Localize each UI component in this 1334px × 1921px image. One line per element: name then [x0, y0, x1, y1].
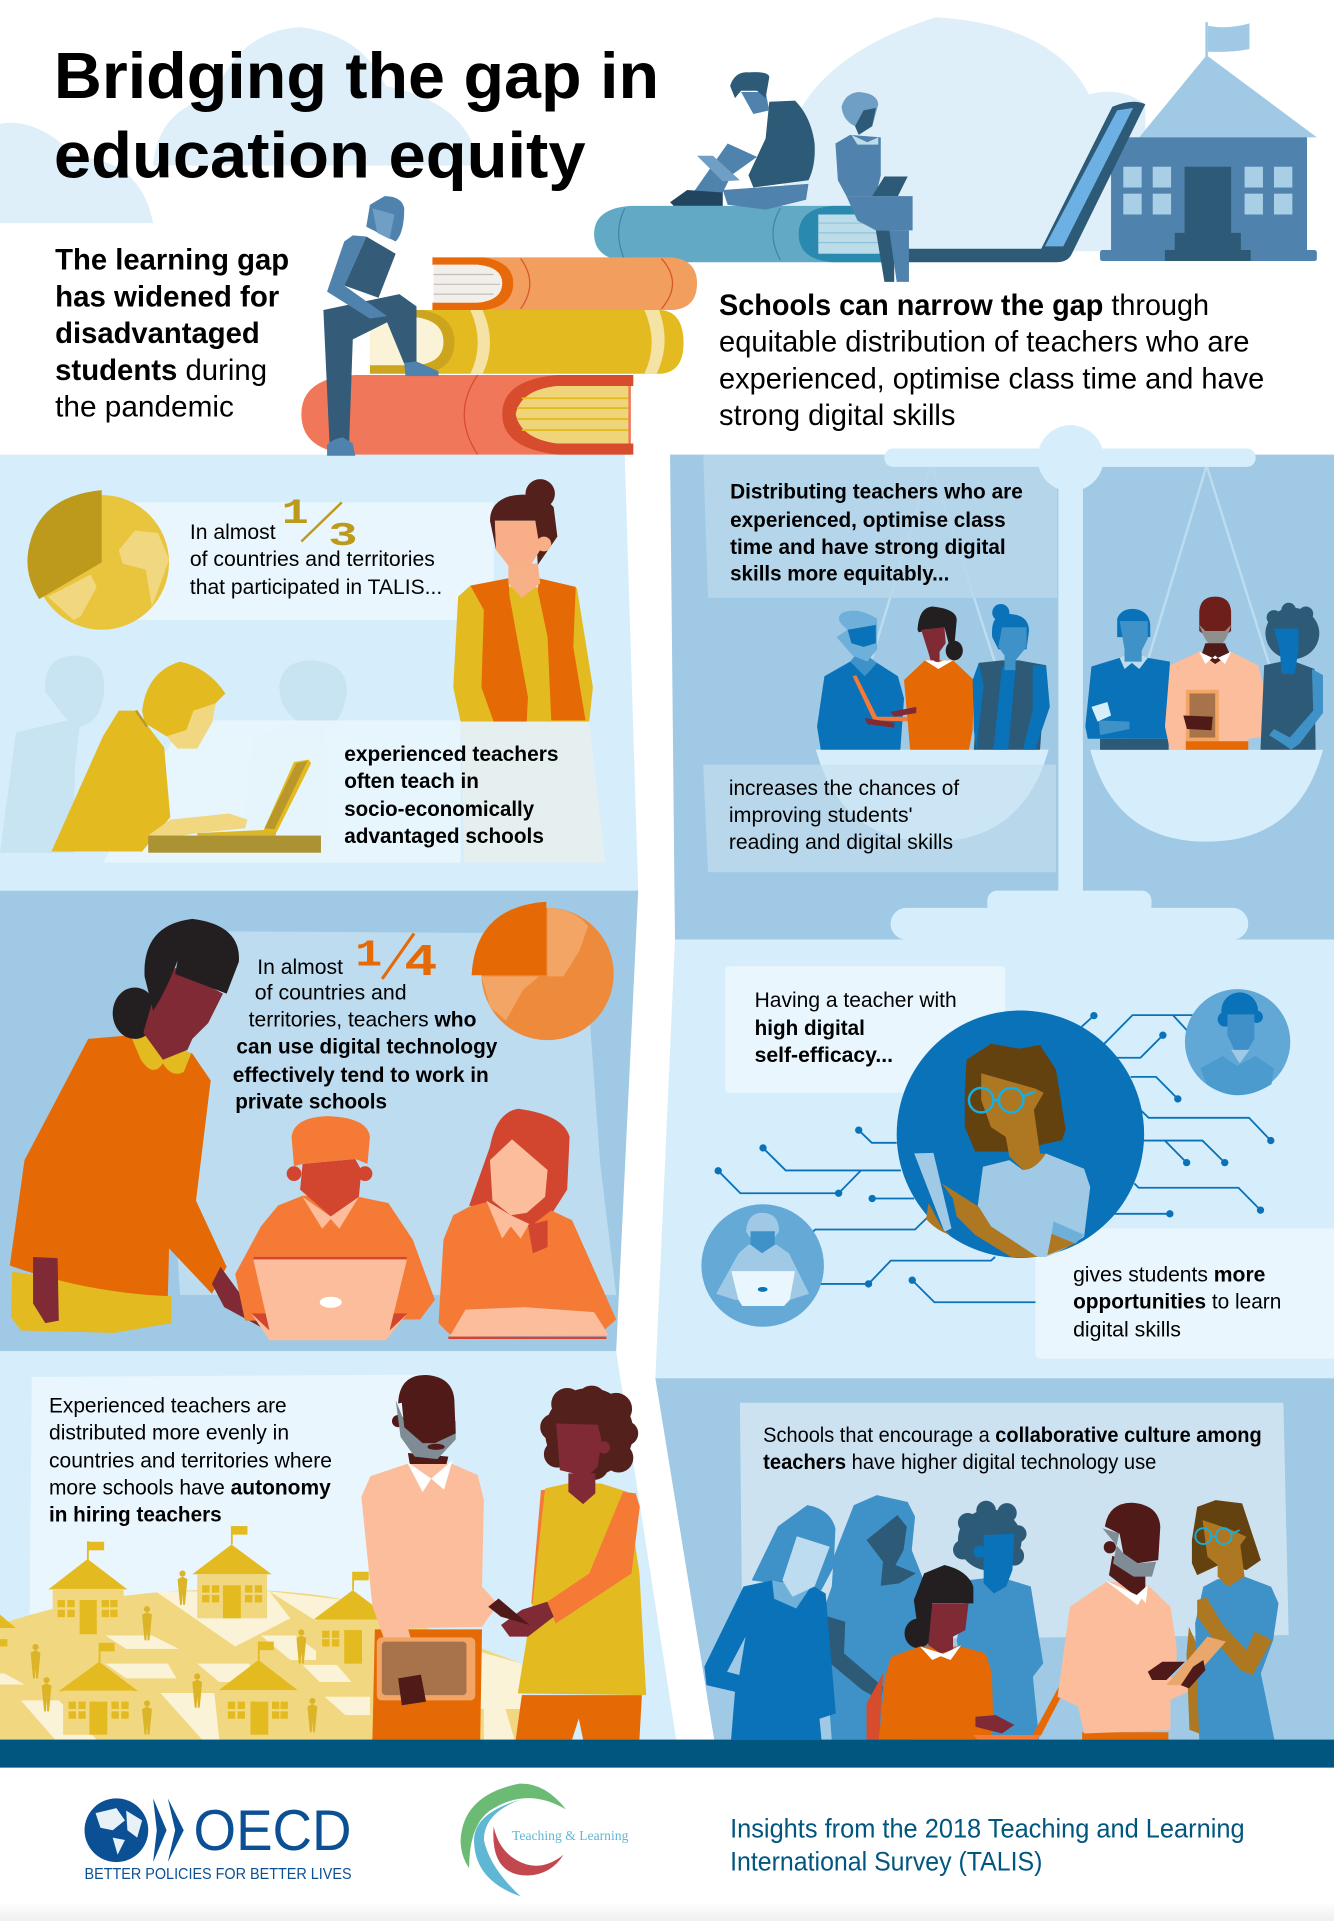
- figure: student in yellow hood: [51, 662, 247, 851]
- text: Schools that encourage a collaborative culture among: [763, 1424, 1262, 1447]
- text: having a teacher: [755, 989, 957, 1067]
- title: education equity: [54, 119, 586, 192]
- text: experienced teachers: [344, 743, 559, 766]
- text: socio-economically: [344, 798, 535, 821]
- icon: teal book: [594, 206, 888, 262]
- panel: left section 3 background: [0, 1351, 676, 1740]
- text: distributing teachers: skills more equitably...: [730, 563, 949, 586]
- fraction one quarter: [355, 934, 437, 989]
- text: having a teacher: Having a teacher with: [755, 989, 957, 1012]
- footer text: survey source: Insights from the 2018 Teaching and Learning: [730, 1814, 1245, 1844]
- panel: learning gap text: students during: [55, 354, 267, 387]
- text box: [171, 931, 616, 1295]
- figure: bearded man with tablet: [1165, 597, 1274, 750]
- icon: globe with one quarter wedge: [472, 902, 614, 1040]
- footer text: survey source: [730, 1814, 1245, 1877]
- fraction one third: 3: [328, 517, 358, 555]
- scale pan left: [816, 750, 1049, 842]
- text box: gives students: [1035, 1228, 1334, 1359]
- title: [54, 39, 659, 192]
- text box: [740, 1403, 1289, 1640]
- icon: teacher in circle: [897, 1010, 1144, 1258]
- figure: teacher in blue: [704, 1505, 836, 1740]
- panel: learning gap text: The learning gap: [55, 244, 289, 277]
- figure: boy student: [235, 1116, 435, 1321]
- text: increases chances: increases the chances of: [729, 777, 959, 800]
- circuit lines: [718, 1015, 1271, 1302]
- figures: group on left pan: [817, 604, 1050, 750]
- text box: [29, 1375, 429, 1629]
- figure: bearded man with laptop: [817, 611, 919, 750]
- panel: left section 2 background: [0, 891, 638, 1351]
- figure: teacher in vest: [453, 479, 593, 722]
- icon: yellow book: [370, 310, 684, 374]
- text: having a teacher: high digital: [755, 1017, 865, 1040]
- figure: teacher in orange: [867, 1565, 1014, 1740]
- text: distributing teachers: [730, 481, 1023, 586]
- text: countries and territories where: [49, 1450, 332, 1473]
- icon: crescent arcs: [461, 1784, 566, 1896]
- panel: right section 3 background: [655, 1378, 1334, 1740]
- figure: woman in orange: [891, 606, 974, 750]
- panel: learning gap text: disadvantaged: [55, 317, 260, 350]
- text: more schools have autonomy: [49, 1477, 331, 1500]
- text: that participated in TALIS...: [190, 576, 442, 599]
- text: gives students: gives students more: [1073, 1263, 1265, 1286]
- figure: person in vest: [973, 604, 1050, 750]
- text: gives students: opportunities to learn: [1073, 1290, 1281, 1313]
- panel: autonomy in hiring: [0, 1375, 646, 1740]
- icon: laptop: [900, 102, 1145, 262]
- panel: one quarter digital technology: [10, 902, 616, 1340]
- panel: experienced teachers callout: [0, 479, 605, 863]
- panel: schools narrow the gap text: equitable distribution of teachers who are: [719, 326, 1249, 359]
- fraction one quarter: 4: [404, 937, 437, 989]
- text: advantaged schools: [344, 825, 544, 848]
- ghost figures: [0, 655, 347, 853]
- icon: small student circle: [701, 1204, 824, 1327]
- text: gives students: digital skills: [1073, 1319, 1181, 1342]
- icon: tablet and hands: [1148, 1637, 1226, 1688]
- panel: learning gap text: the pandemic: [55, 391, 234, 424]
- text: distributing teachers: experienced, optimise class: [730, 509, 1006, 532]
- band: navy footer stripe: [0, 1740, 1334, 1768]
- text: of countries and: [255, 982, 407, 1005]
- figure: girl student: [439, 1109, 616, 1334]
- text: distributing teachers: Distributing teachers who are: [730, 481, 1023, 504]
- text: In almost: [257, 956, 343, 979]
- panel: collaborative culture: [704, 1403, 1289, 1740]
- figure: student with laptop: [835, 92, 913, 282]
- icon: OECD globe: [85, 1798, 148, 1862]
- icon: school building: [1100, 55, 1317, 261]
- panel: schools narrow the gap text: [719, 289, 1264, 432]
- panel: schools narrow the gap text: Schools can narrow the gap through: [719, 289, 1209, 322]
- text: often teach in: [344, 770, 479, 793]
- text: [49, 1395, 332, 1527]
- figure: man shaking hands: [361, 1375, 499, 1740]
- scale beam and stand: [884, 425, 1256, 940]
- circuit nodes: [715, 1011, 1274, 1288]
- background: clouds: [0, 17, 1145, 251]
- panel: digital self-efficacy: [701, 966, 1334, 1359]
- icon: red book: [301, 375, 633, 455]
- footer background: [0, 1768, 1334, 1921]
- text: distributing teachers: time and have strong digital: [730, 536, 1006, 559]
- illustration: village ground: [0, 1590, 522, 1740]
- text: increases chances: [729, 777, 959, 854]
- text: increases chances: reading and digital skills: [729, 831, 953, 854]
- panel: schools narrow the gap text: strong digital skills: [719, 399, 955, 432]
- panel: learning gap text: [55, 244, 289, 424]
- fraction one quarter: 1: [355, 934, 382, 977]
- text: can use digital technology: [236, 1036, 498, 1059]
- text: territories, teachers who: [249, 1009, 477, 1032]
- text: [344, 743, 559, 848]
- faded teacher lower body: [461, 722, 605, 863]
- figure: person climbing books: [323, 196, 439, 456]
- title: Bridging the gap in: [54, 39, 659, 112]
- text box: distributing teachers: [703, 455, 1057, 598]
- scale pan right: [1090, 750, 1323, 842]
- text: [763, 1424, 1262, 1474]
- chart: balance scale: [703, 425, 1323, 940]
- fraction one third: [282, 493, 358, 555]
- text: in hiring teachers: [49, 1504, 222, 1527]
- figure: teacher with glasses: [1187, 1500, 1279, 1740]
- icon: open book: [448, 1307, 609, 1339]
- text: increases chances: improving students': [729, 804, 913, 827]
- figure: teacher with curly hair: [953, 1501, 1043, 1740]
- figure: teacher in orange sweater: [10, 919, 267, 1333]
- icon: laptop open: [251, 1257, 408, 1340]
- text box: [135, 502, 494, 620]
- logo: OECD: [85, 1798, 352, 1883]
- icon: small teacher circle: [1185, 989, 1290, 1095]
- figure: woman shaking hands: [488, 1386, 646, 1740]
- text box: having a teacher: [725, 966, 1005, 1093]
- panel: schools narrow the gap text: experienced, optimise class time and have: [719, 362, 1264, 395]
- figure: person with curly hair: [1261, 603, 1323, 750]
- illustration: stack of books: [301, 196, 697, 456]
- icon: school flag: [1205, 22, 1249, 59]
- icon: orange laptop: [973, 1670, 1073, 1740]
- text box: [103, 720, 461, 863]
- footer text: survey source: International Survey (TALIS): [730, 1847, 1042, 1877]
- text: effectively tend to work in: [233, 1064, 489, 1087]
- illustration: school with laptop and students on book: [594, 22, 1317, 282]
- panel: right section 2 background: [655, 940, 1334, 1378]
- text: teachers have higher digital technology use: [763, 1451, 1156, 1474]
- OECD tagline: BETTER POLICIES FOR BETTER LIVES: [85, 1866, 352, 1883]
- figures: group on right pan: [1085, 597, 1323, 750]
- OECD wordmark: OECD: [194, 1799, 352, 1863]
- icon: houses: [0, 1526, 392, 1735]
- text: distributed more evenly in: [49, 1421, 289, 1444]
- scale strings: [844, 463, 1296, 750]
- panel: left section 1 background: [0, 455, 638, 891]
- text: of countries and territories: [190, 548, 435, 571]
- icon: laptop: [148, 760, 321, 853]
- text box: increases chances: [703, 765, 1056, 872]
- logo: Teaching and Learning: [461, 1784, 629, 1896]
- text: [190, 521, 442, 599]
- figure: student with tablet: [670, 72, 815, 210]
- figure: teacher hair long: [822, 1495, 931, 1740]
- text: gives students: [1073, 1263, 1281, 1342]
- panel: one third callout: [27, 490, 494, 630]
- figure: man with phone: [1085, 609, 1170, 750]
- panel: learning gap text: has widened for: [55, 280, 279, 313]
- logo text: Teaching & Learning: [512, 1828, 629, 1843]
- text: In almost: [190, 521, 276, 544]
- figures: group of teachers: [704, 1495, 1279, 1740]
- panel: right section 1 background: [670, 455, 1334, 940]
- icon: globe with one third wedge: [27, 490, 169, 630]
- text: [233, 956, 498, 1114]
- text: having a teacher: self-efficacy...: [755, 1044, 893, 1067]
- icon: orange book: [432, 257, 697, 310]
- text: private schools: [235, 1091, 387, 1114]
- text: Experienced teachers are: [49, 1395, 287, 1418]
- fraction one third: 1: [282, 493, 309, 534]
- icon: OECD chevrons: [153, 1798, 184, 1862]
- figure: bearded teacher: [1058, 1503, 1191, 1740]
